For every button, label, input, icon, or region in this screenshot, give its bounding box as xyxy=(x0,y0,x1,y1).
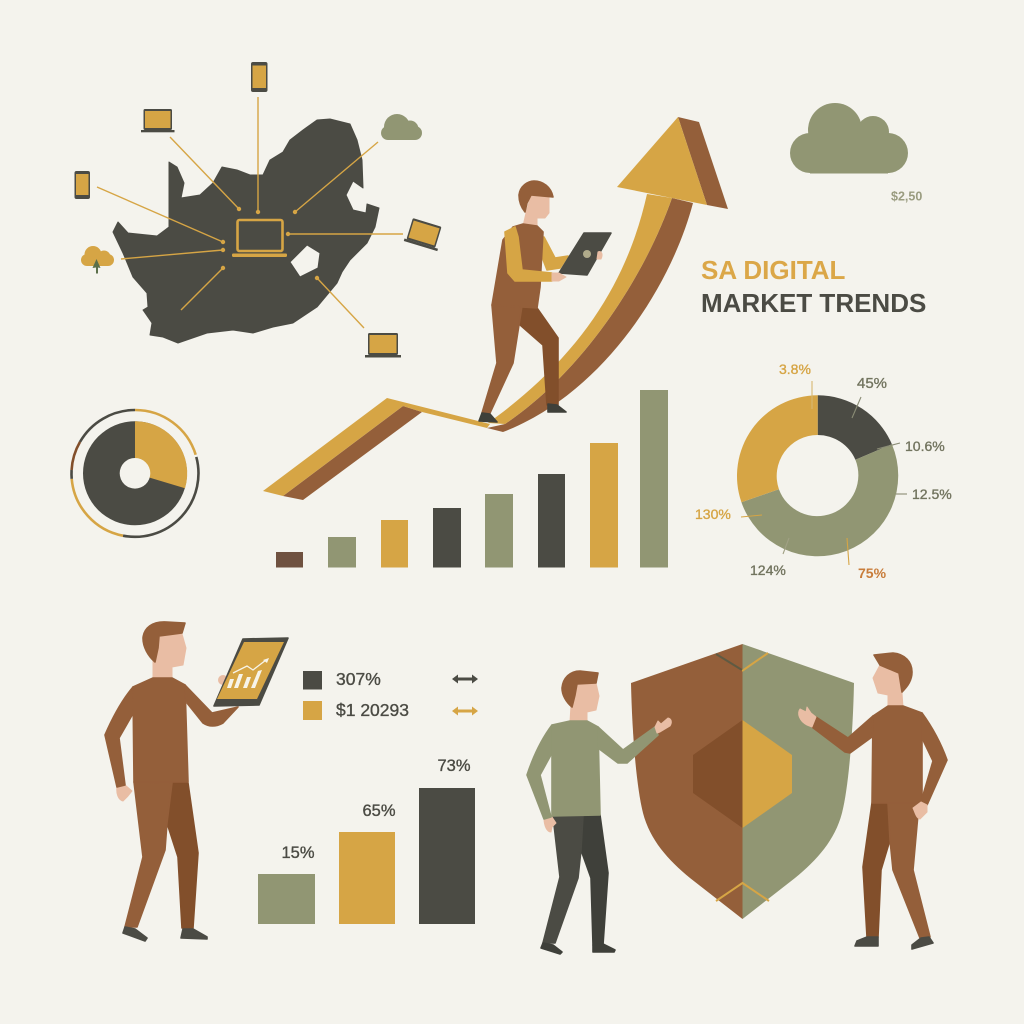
donut labels: 130% xyxy=(695,506,731,522)
shield accent lines xyxy=(716,653,769,901)
raised hand xyxy=(799,707,816,727)
torso xyxy=(492,224,543,308)
title xyxy=(701,255,926,318)
hexagon left xyxy=(693,720,742,828)
icon: tilted laptop right xyxy=(404,218,444,251)
donut labels xyxy=(695,361,952,581)
shoes xyxy=(123,927,207,941)
bar chart: growth bars xyxy=(276,390,668,568)
shield right half xyxy=(742,644,854,919)
donut labels: 124% xyxy=(750,562,786,578)
dark leg xyxy=(863,803,890,937)
growth arrow xyxy=(263,117,728,500)
hair xyxy=(143,622,185,662)
rear leg xyxy=(519,307,558,405)
donut labels: 12.5% xyxy=(912,486,952,502)
chart: small ringed donut xyxy=(71,410,198,537)
bar chart: three percentages: 15% xyxy=(281,844,315,862)
icon: large cloud xyxy=(790,103,908,174)
hands xyxy=(552,252,602,281)
icon: phone left xyxy=(74,171,90,199)
right arm xyxy=(598,727,658,763)
figure: man in brown outfit xyxy=(799,653,947,949)
outer ring segments xyxy=(71,410,198,537)
torso xyxy=(552,721,600,816)
left arm xyxy=(812,716,873,753)
front leg xyxy=(125,782,172,927)
tablet chart icon xyxy=(227,658,269,688)
figure: man with tablet xyxy=(105,622,288,941)
arrow shaft brown xyxy=(487,198,693,432)
legend row: $1 20293: $1 20293 xyxy=(336,700,409,720)
pie hole xyxy=(120,458,150,489)
icon: laptop upper left xyxy=(141,109,174,132)
tablet dot xyxy=(583,250,591,258)
raised hand xyxy=(655,718,671,733)
torso xyxy=(133,678,188,782)
pie gold slice xyxy=(135,421,187,488)
icon: laptop lower right xyxy=(365,333,401,358)
left hand xyxy=(117,785,132,801)
slice sage xyxy=(741,444,898,556)
hair xyxy=(874,653,912,692)
bar chart: three percentages: 65% xyxy=(362,802,396,820)
bar chart: three percentages: 73% xyxy=(437,757,471,775)
pie dark xyxy=(83,421,187,525)
neck and face xyxy=(570,683,599,722)
shoes xyxy=(855,937,933,949)
arrowhead side xyxy=(678,117,728,209)
legend row: 307% xyxy=(303,669,478,690)
neck and face xyxy=(873,665,903,707)
icon: central laptop xyxy=(232,220,287,257)
left arm xyxy=(527,725,552,819)
leader lines xyxy=(741,381,907,565)
arrow shaft gold xyxy=(488,194,672,424)
shoes xyxy=(541,943,615,954)
tablet xyxy=(559,233,611,275)
legend row: $1 20293 xyxy=(303,700,478,720)
light leg xyxy=(888,803,930,938)
donut labels: 3.8% xyxy=(779,361,811,377)
panel: South Africa device map xyxy=(74,62,444,358)
bar chart: three percentages xyxy=(258,757,475,924)
connector lines xyxy=(97,97,403,328)
shield left half xyxy=(631,644,742,919)
donut labels: 75% xyxy=(858,565,887,581)
torso xyxy=(872,706,922,803)
legend xyxy=(303,669,478,720)
tablet xyxy=(214,638,288,706)
arrow ribbon gold xyxy=(263,398,490,496)
chart: main donut xyxy=(695,361,952,581)
rear leg xyxy=(581,815,608,945)
donut labels: 45% xyxy=(857,375,887,392)
side hand xyxy=(913,802,927,819)
right arm xyxy=(921,713,947,805)
hair xyxy=(562,671,598,707)
icon: gold cloud with tree xyxy=(81,246,114,274)
figure: man on arrow with tablet xyxy=(479,181,611,422)
left hand xyxy=(544,817,556,832)
hand behind tablet xyxy=(218,675,228,685)
arrow ribbon lower brown xyxy=(283,406,422,500)
price label: $2,50 xyxy=(891,190,922,204)
left arm xyxy=(105,687,135,787)
icon: sage cloud xyxy=(381,114,422,140)
arrowhead face xyxy=(617,117,707,205)
title: SA DIGITAL xyxy=(701,255,846,285)
slice dark xyxy=(818,395,892,460)
slice gold xyxy=(737,395,818,502)
figure: man in green sweater xyxy=(527,671,671,954)
icon: shield xyxy=(631,644,854,919)
title: MARKET TRENDS xyxy=(701,288,926,318)
near arm sleeve xyxy=(505,227,552,281)
neck and face xyxy=(153,634,186,679)
donut labels: 10.6% xyxy=(905,438,945,454)
neck and face xyxy=(523,195,549,226)
front leg xyxy=(543,816,583,943)
far arm sleeve xyxy=(542,237,568,270)
right arm xyxy=(185,685,238,726)
legend row: 307%: 307% xyxy=(336,669,381,689)
hexagon right xyxy=(742,720,792,828)
hair xyxy=(519,181,553,212)
rear leg xyxy=(167,783,198,928)
map of South Africa xyxy=(113,119,379,343)
front leg xyxy=(482,305,522,413)
shoes xyxy=(479,404,566,422)
icon: phone top xyxy=(251,62,268,92)
